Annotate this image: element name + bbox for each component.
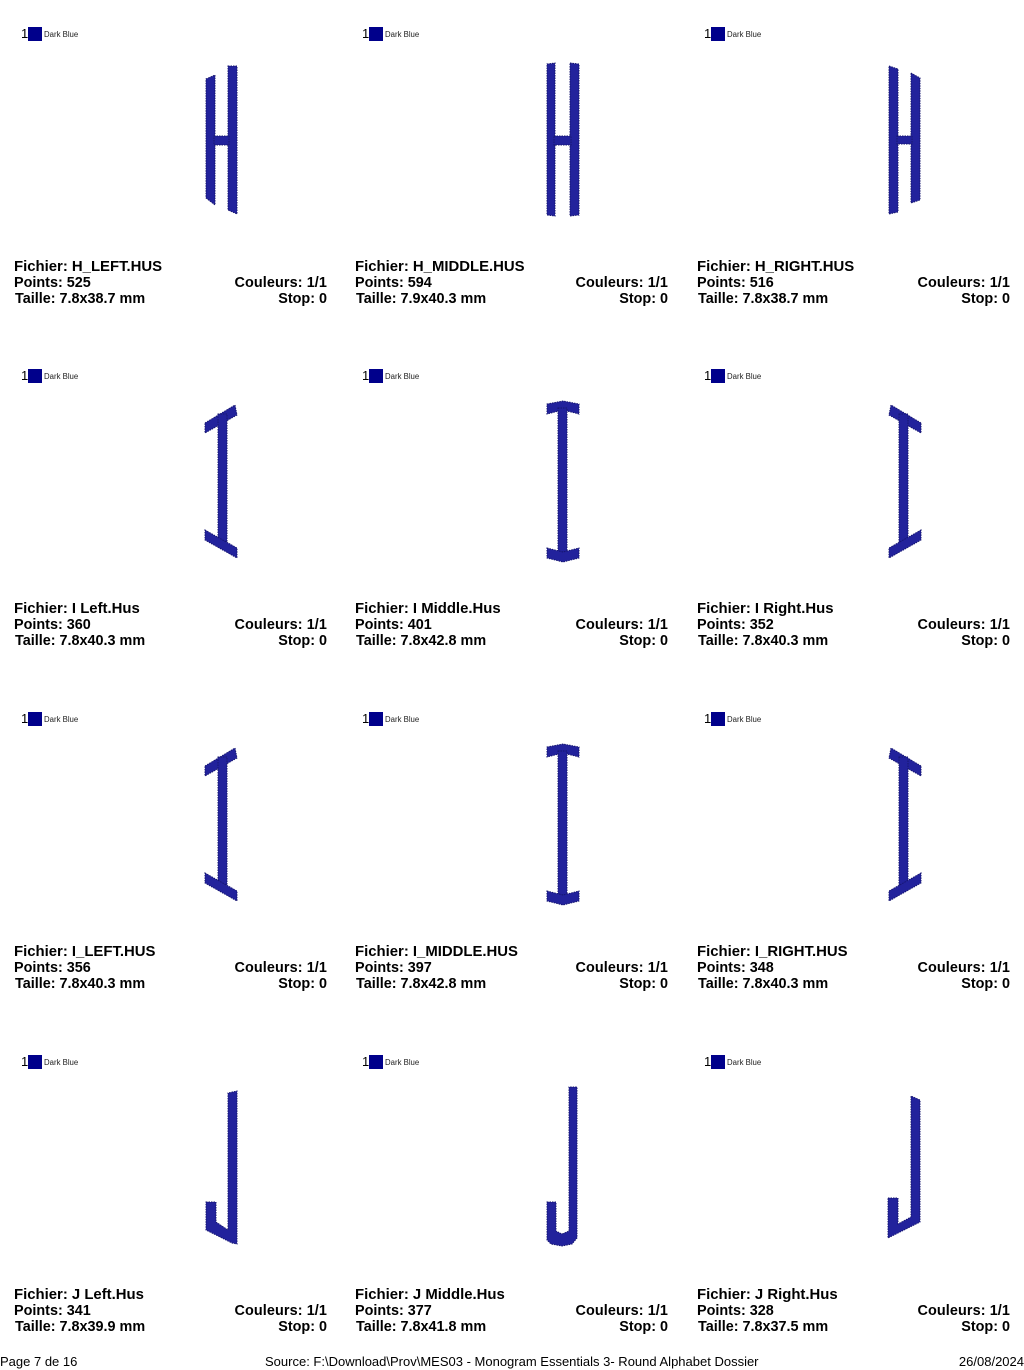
color legend: 1 — [704, 1054, 711, 1069]
file details: Fichier: I_LEFT.HUS — [14, 944, 155, 960]
icon: letter H left — [206, 66, 238, 214]
file details: Taille: 7.8x38.7 mm — [15, 291, 145, 307]
file details: Taille: 7.8x40.3 mm — [15, 976, 145, 992]
footer: date: 26/08/2024 — [959, 1354, 1024, 1369]
file details: Fichier: H_MIDDLE.HUS — [355, 259, 525, 275]
file details: Fichier: H_RIGHT.HUS — [697, 259, 854, 275]
file details: Couleurs: 1/1 — [918, 960, 1010, 976]
color legend: Dark Blue — [385, 715, 419, 724]
file details: Couleurs: 1/1 — [235, 1303, 327, 1319]
color legend: 1 — [21, 711, 28, 726]
file details: Points: 397 — [355, 960, 432, 976]
icon: letter I left — [204, 748, 238, 901]
file details: Points: 401 — [355, 617, 432, 633]
file details: Taille: 7.8x40.3 mm — [15, 633, 145, 649]
file details — [355, 601, 668, 649]
file details: Taille: 7.8x42.8 mm — [356, 633, 486, 649]
file details: Stop: 0 — [278, 1319, 327, 1335]
file details: Points: 516 — [697, 275, 774, 291]
color legend — [361, 1054, 423, 1070]
color legend — [362, 368, 419, 383]
icon: letter J middle — [341, 1028, 681, 1258]
file details: Taille: 7.8x42.8 mm — [356, 976, 486, 992]
file details — [697, 601, 1010, 649]
color legend: Dark Blue — [44, 30, 78, 39]
color legend — [703, 1054, 765, 1070]
color legend: 1 — [21, 368, 28, 383]
icon: letter I right — [888, 404, 922, 558]
color legend: Dark Blue — [727, 30, 761, 39]
color legend: Dark Blue — [727, 715, 761, 724]
file details — [697, 1287, 1010, 1335]
file details: Taille: 7.8x39.9 mm — [15, 1319, 145, 1335]
file details: Stop: 0 — [619, 1319, 668, 1335]
panel: I_MIDDLE — [355, 711, 668, 992]
color legend: Dark Blue — [727, 372, 761, 381]
color legend: 1 — [21, 1054, 28, 1069]
file details: Points: 594 — [355, 275, 432, 291]
panel: J Right.Hus — [683, 1028, 1023, 1338]
color legend: Dark Blue — [385, 1058, 419, 1067]
file details: Points: 348 — [697, 960, 774, 976]
color legend: 1 — [704, 711, 711, 726]
file details — [355, 1287, 668, 1335]
file details: Couleurs: 1/1 — [235, 960, 327, 976]
file details: Taille: 7.8x38.7 mm — [698, 291, 828, 307]
color legend — [21, 711, 78, 726]
file details: Couleurs: 1/1 — [576, 960, 668, 976]
panel: I_RIGHT — [697, 711, 1010, 992]
file details — [14, 601, 327, 649]
color legend — [21, 26, 78, 41]
file details: Stop: 0 — [278, 633, 327, 649]
color legend: 1 — [362, 1054, 369, 1069]
file details: Couleurs: 1/1 — [918, 275, 1010, 291]
file details: Taille: 7.8x40.3 mm — [698, 633, 828, 649]
file details: Stop: 0 — [961, 291, 1010, 307]
file details: Fichier: J Middle.Hus — [355, 1287, 505, 1303]
panel: I Left.Hus — [14, 368, 327, 649]
file details — [14, 944, 327, 992]
icon: letter I left — [204, 404, 238, 558]
file details: Fichier: I Middle.Hus — [355, 601, 501, 617]
file details: Taille: 7.8x37.5 mm — [698, 1319, 828, 1335]
file details: Fichier: I Right.Hus — [697, 601, 834, 617]
color legend: 1 — [362, 26, 369, 41]
file details: Points: 328 — [697, 1303, 774, 1319]
file details — [355, 944, 668, 992]
file details — [697, 259, 1010, 307]
panel: I Right.Hus — [697, 368, 1010, 649]
color legend: 1 — [362, 711, 369, 726]
file details: Stop: 0 — [619, 633, 668, 649]
file details: Points: 341 — [14, 1303, 91, 1319]
file details: Couleurs: 1/1 — [918, 1303, 1010, 1319]
icon: letter I right — [888, 748, 922, 901]
file details: Couleurs: 1/1 — [235, 617, 327, 633]
file details: Couleurs: 1/1 — [235, 275, 327, 291]
file details — [355, 259, 668, 307]
color legend — [704, 368, 761, 383]
color legend: 1 — [704, 368, 711, 383]
file details: Stop: 0 — [961, 1319, 1010, 1335]
color legend: 1 — [362, 368, 369, 383]
file details: Taille: 7.8x40.3 mm — [698, 976, 828, 992]
file details: Stop: 0 — [619, 976, 668, 992]
file details: Couleurs: 1/1 — [918, 617, 1010, 633]
panel: I_LEFT — [14, 711, 327, 992]
file details: Taille: 7.8x41.8 mm — [356, 1319, 486, 1335]
color legend: 1 — [21, 26, 28, 41]
footer: page number: Page 7 de 16 — [0, 1354, 77, 1369]
color legend — [362, 26, 419, 41]
color legend: Dark Blue — [44, 1058, 78, 1067]
icon: letter H middle — [546, 62, 580, 217]
file details: Fichier: I_RIGHT.HUS — [697, 944, 848, 960]
file details: Points: 352 — [697, 617, 774, 633]
icon: letter H right — [888, 66, 920, 214]
icon: letter I middle — [546, 744, 580, 906]
file details: Fichier: J Left.Hus — [14, 1287, 144, 1303]
file details: Points: 356 — [14, 960, 91, 976]
icon: letter J right — [683, 1028, 1023, 1258]
panel: I Middle.Hus — [355, 368, 668, 649]
color legend: 1 — [704, 26, 711, 41]
color legend — [704, 26, 761, 41]
icon: letter I middle — [546, 400, 580, 562]
file details: Couleurs: 1/1 — [576, 275, 668, 291]
icon: letter J left — [206, 1090, 238, 1245]
file details: Taille: 7.9x40.3 mm — [356, 291, 486, 307]
panel: J Middle.Hus — [341, 1028, 681, 1338]
file details: Stop: 0 — [619, 291, 668, 307]
file details: Fichier: I_MIDDLE.HUS — [355, 944, 518, 960]
color legend: Dark Blue — [44, 715, 78, 724]
file details: Fichier: J Right.Hus — [697, 1287, 838, 1303]
file details: Stop: 0 — [961, 633, 1010, 649]
color legend — [21, 1054, 78, 1069]
panel: H_LEFT — [14, 26, 327, 307]
file details: Fichier: H_LEFT.HUS — [14, 259, 162, 275]
file details: Couleurs: 1/1 — [576, 1303, 668, 1319]
file details — [14, 259, 327, 307]
color legend: Dark Blue — [44, 372, 78, 381]
file details: Points: 360 — [14, 617, 91, 633]
color legend: Dark Blue — [385, 30, 419, 39]
file details: Stop: 0 — [278, 976, 327, 992]
file details: Fichier: I Left.Hus — [14, 601, 140, 617]
footer: source path: Source: F:\Download\Prov\MES03 - Monogram Essentials 3- Round Alphabet Dossier — [265, 1354, 759, 1369]
color legend — [362, 711, 419, 726]
file details: Points: 525 — [14, 275, 91, 291]
file details — [697, 944, 1010, 992]
panel: H_MIDDLE — [355, 26, 668, 307]
color legend: Dark Blue — [385, 372, 419, 381]
file details: Points: 377 — [355, 1303, 432, 1319]
color legend — [704, 711, 761, 726]
color legend — [21, 368, 78, 383]
file details: Stop: 0 — [961, 976, 1010, 992]
file details: Stop: 0 — [278, 291, 327, 307]
panel: H_RIGHT — [697, 26, 1010, 307]
file details: Couleurs: 1/1 — [576, 617, 668, 633]
file details — [14, 1287, 327, 1335]
color legend: Dark Blue — [727, 1058, 761, 1067]
panel: J Left.Hus — [14, 1054, 327, 1335]
